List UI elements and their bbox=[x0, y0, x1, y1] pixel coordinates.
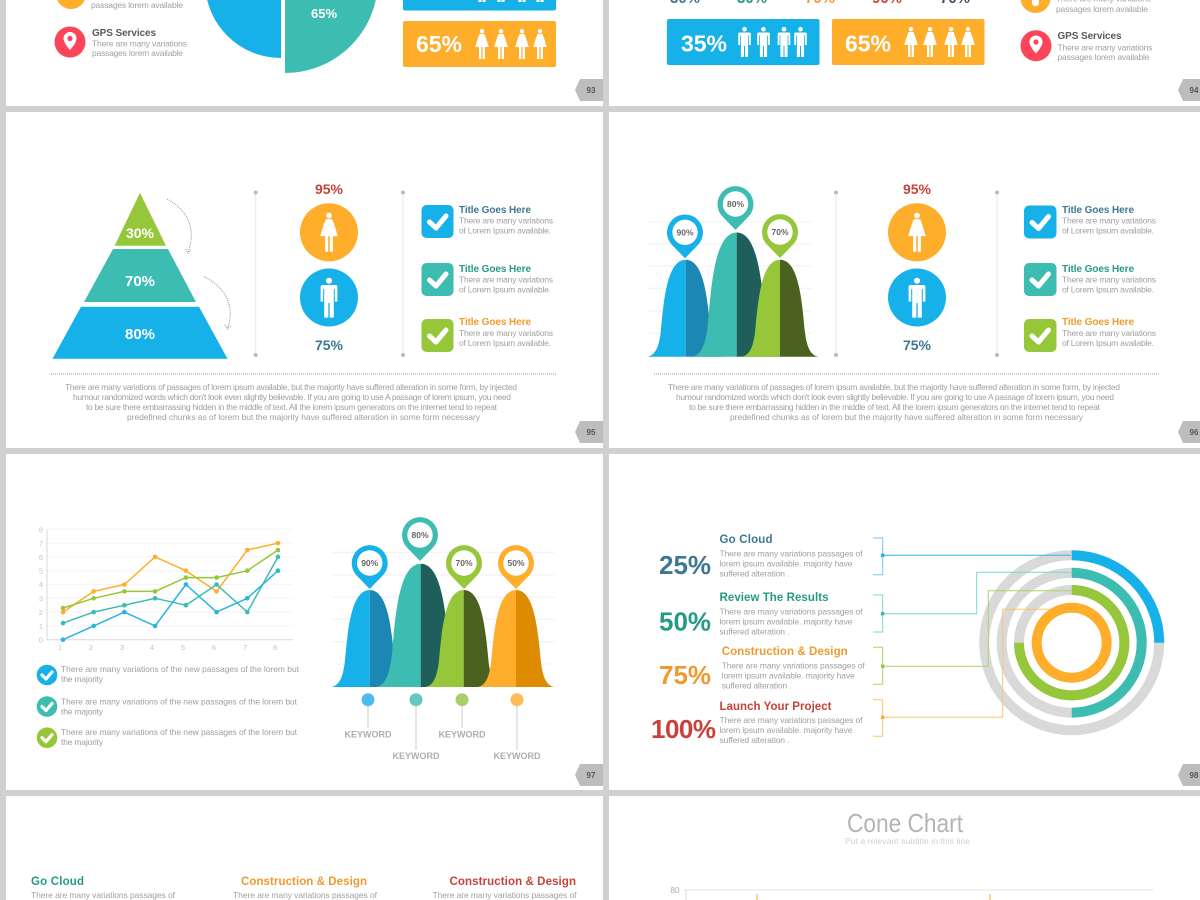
checklist item 2: of Lorem Ipsum available. bbox=[459, 284, 551, 294]
checklist item 3 bbox=[1024, 317, 1156, 352]
connector: blue bbox=[873, 538, 1071, 575]
stat row: Go Cloud bbox=[659, 534, 863, 580]
line chart: 4 bbox=[39, 580, 43, 589]
page tag 93: 93 bbox=[587, 86, 596, 95]
checklist item 1: of Lorem Ipsum available. bbox=[459, 226, 551, 236]
stat row: Review The Results: suffered alteration . bbox=[720, 626, 790, 636]
column: Construction & Design bbox=[233, 876, 378, 900]
paragraph: humour randomized words which don't look even slightly believable. If you are going to use A passage of lorem ipsum, you need bbox=[676, 392, 1114, 402]
concentric ring chart bbox=[984, 555, 1159, 730]
column: Construction & Design: There are many variations passages of bbox=[233, 890, 378, 900]
pyramid chart bbox=[52, 193, 228, 359]
dotted rule bbox=[654, 373, 1160, 375]
bell chart with pins: 80% bbox=[727, 199, 744, 209]
stat row: Go Cloud: lorem ipsum available. majority have bbox=[720, 558, 853, 568]
pie chart bbox=[205, 0, 378, 73]
cone chart top: 80 bbox=[671, 886, 680, 895]
stat box: orange women 65%: 65% bbox=[845, 30, 891, 56]
divider right bbox=[401, 190, 405, 357]
bullet 3: the majority bbox=[61, 737, 104, 747]
bell chart with pins bbox=[648, 186, 818, 357]
pyramid chart: 30% bbox=[126, 225, 155, 241]
line chart: 7 bbox=[39, 539, 43, 548]
text: partial feature description bbox=[1056, 0, 1151, 14]
checklist item 3: There are many variations bbox=[1062, 328, 1156, 338]
column: Construction & Design: Construction & Design bbox=[241, 876, 367, 888]
stat row: Go Cloud: 25% bbox=[659, 550, 711, 580]
stat: men 75% bbox=[888, 268, 946, 353]
icon: orange badge bbox=[1020, 0, 1050, 13]
checklist item 2: Title Goes Here bbox=[459, 264, 531, 275]
divider right bbox=[995, 190, 999, 357]
bullet 1 bbox=[37, 664, 300, 685]
checklist item 2 bbox=[422, 263, 553, 296]
line chart: 1 bbox=[58, 643, 62, 652]
line chart: 1 bbox=[39, 622, 43, 631]
icon: GPS location pin bbox=[1020, 30, 1052, 61]
bell chart with pins: 50% bbox=[507, 558, 525, 568]
keyword marker 4: KEYWORD bbox=[494, 751, 541, 761]
paragraph bbox=[65, 382, 517, 422]
text: GPS services bbox=[92, 28, 187, 58]
checklist item 3: Title Goes Here bbox=[1062, 317, 1134, 328]
bullet 1: There are many variations of the new passages of the lorem but bbox=[61, 664, 300, 674]
bullet 2: the majority bbox=[61, 706, 104, 716]
icon: orange badge bbox=[56, 0, 86, 9]
column: Go Cloud bbox=[31, 876, 176, 900]
bell chart with pins: 80% bbox=[411, 530, 429, 540]
divider left bbox=[834, 190, 838, 357]
panel: slide 98 bbox=[609, 454, 1200, 790]
line chart bbox=[39, 526, 293, 652]
paragraph: There are many variations of passages of lorem ipsum available, but the majority have suffered alteration in some form, by injected bbox=[668, 382, 1120, 392]
bullet 2: There are many variations of the new passages of the lorem but bbox=[61, 696, 298, 706]
connector: teal bbox=[873, 572, 1071, 632]
line chart: 5 bbox=[39, 566, 43, 576]
stat row: Construction & Design: suffered alteration . bbox=[722, 680, 792, 690]
checklist item 1: Title Goes Here bbox=[1062, 205, 1134, 216]
column: Go Cloud: Go Cloud bbox=[31, 876, 84, 888]
pyramid chart: 70% bbox=[125, 273, 155, 290]
panel: slide 97 bbox=[6, 454, 603, 790]
pyramid chart: 80% bbox=[125, 326, 155, 343]
bullet 3 bbox=[37, 727, 298, 748]
stat row: Review The Results bbox=[659, 592, 863, 637]
checklist item 3 bbox=[422, 317, 553, 352]
paragraph: humour randomized words which don't look even slightly believable. If you are going to use A passage of lorem ipsum, you need bbox=[73, 392, 511, 402]
pie chart: 65% bbox=[311, 6, 337, 21]
text: GPS services bbox=[1058, 31, 1152, 62]
line chart: 6 bbox=[39, 553, 43, 562]
stat row: Go Cloud: Go Cloud bbox=[720, 534, 772, 546]
panel: slide 99 bbox=[6, 796, 603, 900]
panel: slide 93 bbox=[6, 0, 603, 106]
dotted arrow: upper bbox=[167, 199, 191, 253]
bell chart with pins: 90% bbox=[676, 227, 694, 237]
line chart: 0 bbox=[39, 636, 43, 644]
bell chart with pins: 70% bbox=[771, 227, 789, 237]
checklist item 2: There are many variations bbox=[459, 274, 553, 284]
page tag 95 bbox=[575, 421, 603, 443]
checklist item 1: Title Goes Here bbox=[459, 205, 531, 216]
checklist item 2 bbox=[1024, 263, 1156, 296]
stat row: Construction & Design: 75% bbox=[659, 660, 711, 690]
stat row: Launch Your Project: 100% bbox=[651, 714, 716, 744]
dotted arrow: lower bbox=[204, 277, 230, 329]
bullet 2 bbox=[37, 696, 298, 717]
text: partial feature description: passages lorem available bbox=[91, 0, 183, 10]
panel: slide 94 bbox=[609, 0, 1200, 106]
stat box: orange women 65%: 65% bbox=[416, 31, 462, 57]
paragraph: predefined chunks as of lorem but the majority have suffered alteration in some form necessary bbox=[730, 412, 1084, 422]
stat: men 75% bbox=[300, 268, 358, 353]
bell chart with pins bbox=[332, 517, 555, 687]
stat row: Construction & Design: There are many variations passages of bbox=[722, 660, 865, 670]
row of percentages bbox=[670, 0, 970, 7]
stat row: Launch Your Project: lorem ipsum available. majority have bbox=[720, 725, 853, 735]
stat row: Construction & Design bbox=[659, 646, 865, 690]
keyword marker 2 bbox=[392, 693, 440, 761]
text: GPS services: There are many variations bbox=[1058, 42, 1152, 52]
page tag 96: 96 bbox=[1190, 428, 1199, 437]
page tag 95: 95 bbox=[587, 428, 596, 437]
checklist item 3: Title Goes Here bbox=[459, 317, 531, 328]
checklist item 2: Title Goes Here bbox=[1062, 264, 1134, 275]
text: GPS services: passages lorem available bbox=[92, 48, 183, 58]
subtitle: Put a relevant subtitle in this line bbox=[845, 836, 970, 846]
stat row: Review The Results: lorem ipsum available. majority have bbox=[720, 616, 853, 626]
column: Construction & Design red bbox=[432, 876, 577, 900]
keyword marker 3 bbox=[438, 693, 486, 740]
paragraph bbox=[668, 382, 1120, 422]
page tag 98 bbox=[1178, 764, 1200, 786]
stat row: Construction & Design: Construction & Design bbox=[722, 646, 848, 658]
stat row: Launch Your Project: suffered alteration . bbox=[720, 735, 790, 745]
stat row: Go Cloud: There are many variations passages of bbox=[720, 548, 863, 558]
stat row: Review The Results: There are many variations passages of bbox=[720, 606, 863, 616]
stat row: Launch Your Project bbox=[651, 701, 863, 745]
line chart: 5 bbox=[181, 643, 185, 652]
checklist item 2: of Lorem Ipsum available. bbox=[1062, 284, 1154, 294]
connector: green bbox=[873, 591, 1071, 684]
text: GPS services: passages lorem available bbox=[1058, 52, 1150, 62]
bullet 3: There are many variations of the new passages of the lorem but bbox=[61, 727, 298, 737]
keyword marker 2: KEYWORD bbox=[392, 751, 440, 761]
paragraph: to be sure there embarrassing hidden in the middle of text. All the lorem ipsum generators on the internet tend to repeat bbox=[689, 402, 1101, 412]
paragraph: predefined chunks as of lorem but the majority have suffered alteration in some form necessary bbox=[127, 412, 481, 422]
stat row: Review The Results: 50% bbox=[659, 607, 711, 637]
panel: slide 95 bbox=[6, 112, 603, 448]
stat box: orange women 65% bbox=[403, 21, 556, 67]
line chart: 2 bbox=[39, 608, 43, 617]
stat row: Launch Your Project: Launch Your Project bbox=[720, 701, 832, 713]
bell chart with pins: 70% bbox=[455, 558, 473, 568]
divider left bbox=[254, 190, 258, 357]
panel: slide 96 bbox=[609, 112, 1200, 448]
page tag 98: 98 bbox=[1190, 771, 1199, 780]
checklist item 1: of Lorem Ipsum available. bbox=[1062, 226, 1154, 236]
line chart: 3 bbox=[39, 594, 43, 603]
stat: men 75%: 75% bbox=[903, 337, 932, 353]
stat box: blue men 35% bbox=[667, 19, 820, 65]
checklist item 1 bbox=[422, 205, 553, 238]
stat: women 95% bbox=[888, 181, 946, 261]
column: Construction & Design red: There are many variations passages of bbox=[432, 890, 577, 900]
stat row: Review The Results: Review The Results bbox=[720, 592, 828, 604]
keyword marker 1: KEYWORD bbox=[344, 730, 392, 740]
line chart: 3 bbox=[120, 643, 124, 652]
page tag 97 bbox=[575, 764, 603, 786]
bullet 1: the majority bbox=[61, 674, 104, 684]
line chart: 8 bbox=[39, 526, 43, 534]
page tag 94 bbox=[1178, 79, 1200, 101]
checklist item 3: There are many variations bbox=[459, 328, 553, 338]
column: Go Cloud: There are many variations passages of bbox=[31, 890, 176, 900]
line chart: 2 bbox=[89, 643, 93, 652]
paragraph: There are many variations of passages of lorem ipsum available, but the majority have suffered alteration in some form, by injected bbox=[65, 382, 517, 392]
column: Construction & Design red: Construction & Design bbox=[450, 876, 576, 888]
stat row: Launch Your Project: There are many variations passages of bbox=[720, 715, 863, 725]
stat box: orange women 65% bbox=[832, 19, 984, 65]
title: Cone Chart bbox=[847, 808, 964, 838]
bell chart with pins: 90% bbox=[361, 558, 379, 568]
stat box: blue men 35%: 35% bbox=[681, 30, 727, 56]
checklist item 1: There are many variations bbox=[459, 216, 553, 226]
checklist item 1 bbox=[1024, 205, 1156, 238]
checklist item 3: of Lorem Ipsum available. bbox=[1062, 338, 1154, 348]
text: GPS services: GPS Services bbox=[1058, 31, 1122, 42]
checklist item 2: There are many variations bbox=[1062, 274, 1156, 284]
dotted rule bbox=[51, 373, 557, 375]
line chart: 4 bbox=[150, 643, 154, 652]
page tag 96 bbox=[1178, 421, 1200, 443]
stat box: blue men bbox=[403, 0, 556, 10]
text: partial feature description: passages lorem available bbox=[1056, 4, 1148, 14]
paragraph: to be sure there embarrassing hidden in the middle of text. All the lorem ipsum generators on the internet tend to repeat bbox=[86, 402, 498, 412]
stat row: Go Cloud: suffered alteration . bbox=[720, 568, 790, 578]
page tag 94: 94 bbox=[1190, 86, 1199, 95]
line chart: 7 bbox=[243, 643, 247, 652]
line chart: 8 bbox=[273, 643, 277, 652]
connector: orange bbox=[873, 609, 1050, 736]
keyword marker 3: KEYWORD bbox=[438, 730, 486, 740]
page tag 97: 97 bbox=[587, 771, 596, 780]
text: GPS services: GPS Services bbox=[92, 28, 156, 39]
stat: women 95%: 95% bbox=[315, 181, 344, 197]
stat: women 95% bbox=[300, 181, 358, 261]
checklist item 1: There are many variations bbox=[1062, 216, 1156, 226]
icon: GPS location pin bbox=[54, 26, 86, 58]
line chart: 6 bbox=[212, 643, 216, 652]
stat: women 95%: 95% bbox=[903, 181, 932, 197]
checklist item 3: of Lorem Ipsum available. bbox=[459, 338, 551, 348]
keyword marker 4 bbox=[494, 693, 541, 761]
panel: slide 100 bbox=[609, 796, 1200, 900]
keyword marker 1 bbox=[344, 693, 392, 740]
stat: men 75%: 75% bbox=[315, 337, 344, 353]
text: GPS services: There are many variations bbox=[92, 38, 187, 48]
page tag 93 bbox=[575, 79, 603, 101]
stat row: Construction & Design: lorem ipsum available. majority have bbox=[722, 670, 855, 680]
